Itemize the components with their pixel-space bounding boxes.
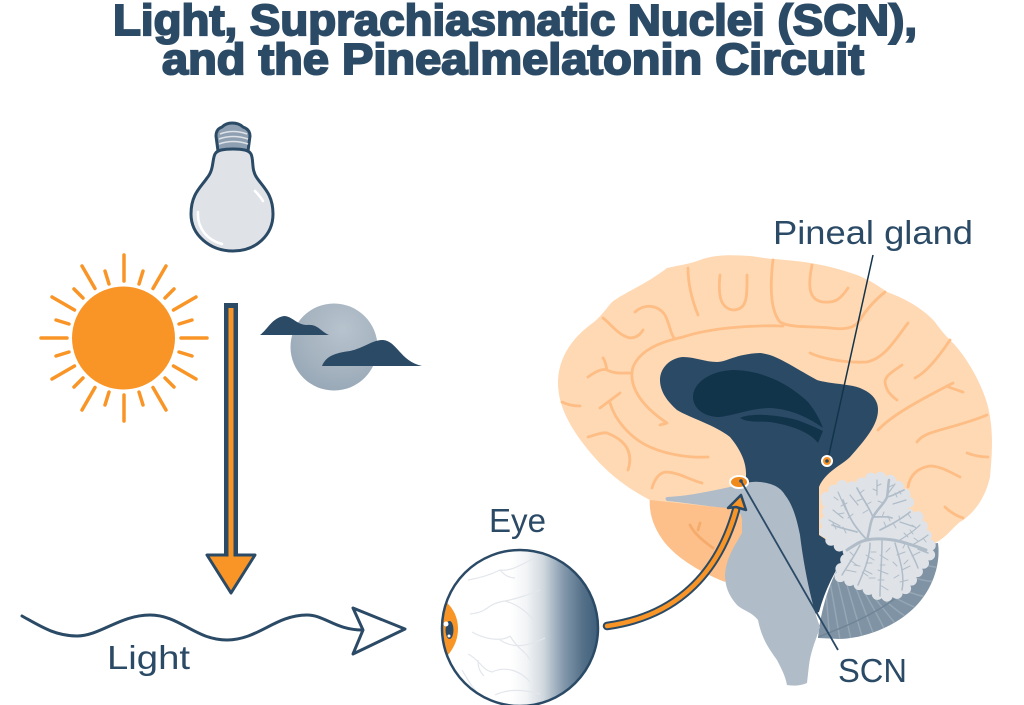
label: Light: Light [107,639,190,676]
icon: moon with clouds [260,304,422,390]
marker: SCN [730,476,838,650]
brain: cerebellum arbor [824,476,932,597]
brain: brainstem [666,482,820,686]
icon: sun [41,255,207,421]
brain: sulci [562,260,988,548]
brain: cerebellum outer [818,543,942,640]
arrow: light down [207,303,255,593]
label: SCN: SCN [838,652,907,689]
arrow: eye to SCN [607,495,746,626]
brain: diagram [558,255,992,686]
brain: dark ventricle and midbrain [660,353,878,620]
arrow: light wave [22,608,405,654]
icon: eye [436,550,598,705]
icon: light bulb [191,123,273,251]
title [113,0,917,84]
label: Pineal gland: Pineal gland [773,214,973,251]
brain: lower temporal lobe [650,495,745,582]
title: and the Pinealmelatonin Circuit [162,35,864,84]
label: Eye: Eye [489,502,546,539]
brain: inner dark region [693,370,823,428]
brain: cerebrum [558,255,992,560]
marker: pineal gland [822,255,873,466]
